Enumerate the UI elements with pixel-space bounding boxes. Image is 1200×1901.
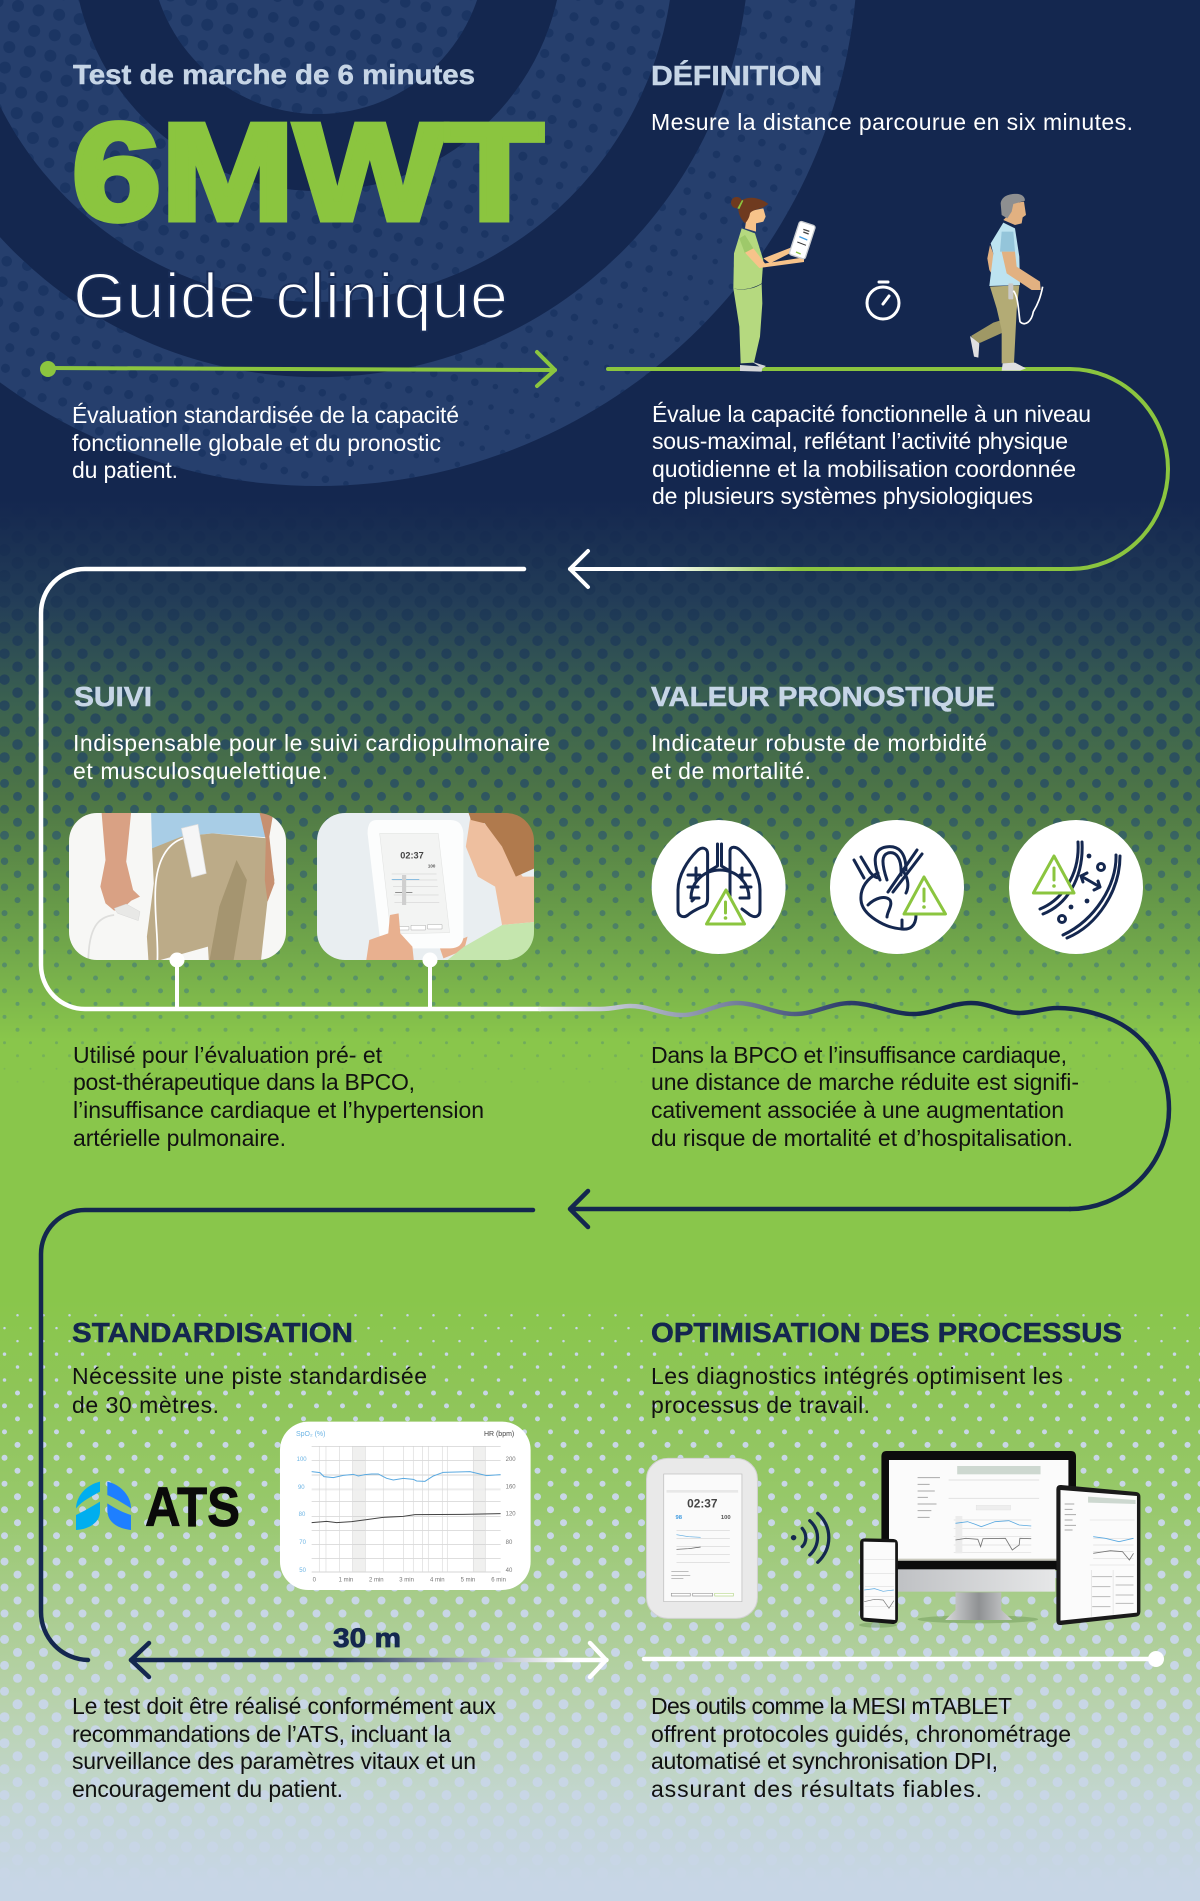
text block: intro: fonctionnelle globale et du pronostic bbox=[72, 430, 441, 456]
text block: suivi: l’insuffisance cardiaque et l’hypertension bbox=[73, 1097, 484, 1123]
text: suivi intro: et musculosquelettique. bbox=[73, 758, 328, 784]
heading: suivi: SUIVI bbox=[74, 681, 152, 712]
chart: SpO2 and heart rate: 50 bbox=[299, 1568, 307, 1574]
text block: suivi bbox=[73, 1042, 484, 1151]
subtitle: test de marche: Test de marche de 6 minutes bbox=[73, 59, 475, 90]
text: suivi intro bbox=[73, 730, 550, 784]
chart: SpO2 and heart rate: 40 bbox=[506, 1568, 513, 1574]
arrow: green intro arrow bbox=[40, 352, 555, 386]
text block: optimisation: automatisé et synchronisation DPI, bbox=[651, 1748, 998, 1774]
text block: optimisation: offrent protocoles guidés, chronométrage bbox=[651, 1721, 1071, 1747]
text block: définition: quotidienne et la mobilisation coordonnée bbox=[652, 456, 1076, 482]
chart: SpO2 and heart rate: 70 bbox=[299, 1540, 307, 1546]
connector: navy left loop and 30 m arrow bbox=[41, 1210, 606, 1677]
chart: SpO2 and heart rate: 4 min bbox=[430, 1577, 445, 1583]
connector: white line with end dot bbox=[644, 1651, 1164, 1667]
text: standardisation intro: Nécessite une piste standardisée bbox=[72, 1363, 427, 1389]
title: guide clinique: Guide clinique bbox=[73, 260, 508, 332]
chart: SpO2 and heart rate: 160 bbox=[506, 1485, 516, 1491]
text block: valeur pronostique: cativement associée à une augmentation bbox=[651, 1097, 1064, 1123]
text block: valeur pronostique: du risque de mortalité et d’hospitalisation. bbox=[651, 1125, 1073, 1151]
icon: lungs with warning bbox=[652, 820, 786, 954]
photo: clinician using tablet bbox=[314, 810, 538, 963]
text: standardisation intro bbox=[72, 1363, 427, 1418]
text block: valeur pronostique bbox=[651, 1042, 1079, 1151]
chart: SpO2 and heart rate: HR (bpm) bbox=[484, 1431, 514, 1438]
heading: optimisation: OPTIMISATION DES PROCESSUS bbox=[651, 1317, 1122, 1348]
icon: wireless signal bbox=[791, 1513, 829, 1562]
chart: SpO2 and heart rate bbox=[280, 1422, 531, 1590]
text block: standardisation: encouragement du patient. bbox=[72, 1776, 343, 1802]
illustration: MESI tablet device bbox=[647, 1458, 757, 1618]
background: dark halftone dots bbox=[0, 511, 1200, 1082]
text block: suivi: post-thérapeutique dans la BPCO, bbox=[73, 1069, 415, 1095]
text block: intro bbox=[72, 402, 459, 483]
chart: SpO2 and heart rate: 3 min bbox=[399, 1577, 414, 1583]
text: valeur pronostique intro: Indicateur robuste de morbidité bbox=[651, 730, 987, 756]
text block: définition: sous-maximal, reflétant l’activité physique bbox=[652, 428, 1068, 454]
text block: standardisation: recommandations de l’ATS, incluant la bbox=[72, 1721, 451, 1747]
label: 30 m: 30 m bbox=[333, 1623, 401, 1653]
photo: clinician using tablet: 100 bbox=[428, 864, 436, 869]
chart: SpO2 and heart rate: 80 bbox=[506, 1540, 513, 1546]
logo: ATS: ATS bbox=[145, 1475, 240, 1538]
illustration: MESI tablet device: 98 bbox=[675, 1515, 683, 1521]
text block: optimisation: assurant des résultats fiables. bbox=[651, 1776, 982, 1802]
connector: green loop with white arrow bbox=[570, 369, 1168, 587]
heading: valeur pronostique: VALEUR PRONOSTIQUE bbox=[651, 681, 995, 712]
text block: valeur pronostique: Dans la BPCO et l’insuffisance cardiaque, bbox=[651, 1042, 1067, 1068]
connector: photo nodes bbox=[170, 952, 438, 1009]
text: standardisation intro: de 30 mètres. bbox=[72, 1392, 219, 1418]
text block: définition: de plusieurs systèmes physiologiques bbox=[652, 483, 1033, 509]
icon: stopwatch bbox=[867, 282, 899, 319]
illustration: MESI tablet device: 02:37 bbox=[687, 1497, 718, 1510]
connector: white left loop and wave bbox=[41, 569, 1169, 1227]
illustration: MESI tablet device: 100 bbox=[721, 1515, 731, 1521]
chart: SpO2 and heart rate: 120 bbox=[506, 1512, 516, 1518]
text: valeur pronostique intro: et de mortalité. bbox=[651, 758, 811, 784]
text: optimisation intro: processus de travail. bbox=[651, 1392, 870, 1418]
heading: définition: DÉFINITION bbox=[651, 60, 822, 91]
chart: SpO2 and heart rate: 2 min bbox=[369, 1577, 384, 1583]
chart: SpO2 and heart rate: 0 bbox=[313, 1577, 317, 1583]
text block: intro: Évaluation standardisée de la capacité bbox=[72, 402, 459, 428]
logo: ATS bbox=[76, 1475, 240, 1538]
text block: standardisation: surveillance des paramètres vitaux et un bbox=[72, 1748, 476, 1774]
illustration: computer, phone and tablet bbox=[859, 1451, 1140, 1628]
chart: SpO2 and heart rate: 1 min bbox=[339, 1577, 353, 1583]
chart: SpO2 and heart rate: 5 min bbox=[461, 1577, 475, 1583]
text: définition intro: Mesure la distance parcourue en six minutes. bbox=[651, 109, 1133, 135]
text block: optimisation: Des outils comme la MESI mTABLET bbox=[651, 1693, 1012, 1719]
chart: SpO2 and heart rate: 200 bbox=[506, 1457, 516, 1463]
illustration: walking patient bbox=[970, 194, 1043, 371]
text block: optimisation bbox=[651, 1693, 1071, 1802]
text block: suivi: artérielle pulmonaire. bbox=[73, 1125, 286, 1151]
icon: blood vessel with warning bbox=[1009, 820, 1143, 954]
text: optimisation intro: Les diagnostics intégrés optimisent les bbox=[651, 1363, 1063, 1389]
text block: valeur pronostique: une distance de marche réduite est signifi- bbox=[651, 1069, 1079, 1095]
heading: standardisation: STANDARDISATION bbox=[72, 1317, 353, 1348]
text block: définition bbox=[652, 401, 1091, 509]
chart: SpO2 and heart rate: SpO₂ (%) bbox=[296, 1431, 325, 1438]
text: valeur pronostique intro bbox=[651, 730, 987, 784]
text: optimisation intro bbox=[651, 1363, 1063, 1418]
text block: standardisation bbox=[72, 1693, 496, 1802]
text block: définition: Évalue la capacité fonctionnelle à un niveau bbox=[652, 401, 1091, 427]
icon: heart with warning bbox=[830, 820, 964, 954]
text: suivi intro: Indispensable pour le suivi cardiopulmonaire bbox=[73, 730, 550, 756]
background: concentric rings bbox=[0, 0, 856, 486]
chart: SpO2 and heart rate: 90 bbox=[298, 1485, 305, 1491]
text block: suivi: Utilisé pour l’évaluation pré- et bbox=[73, 1042, 383, 1068]
background: light halftone dots bbox=[0, 1315, 1200, 1886]
chart: SpO2 and heart rate: 100 bbox=[297, 1457, 307, 1463]
illustration: nurse with tablet bbox=[731, 197, 816, 372]
text block: standardisation: Le test doit être réalisé conformément aux bbox=[72, 1693, 496, 1719]
text block: intro: du patient. bbox=[72, 457, 178, 483]
title: 6MWT: 6MWT bbox=[72, 95, 543, 249]
photo: clinician using tablet: 02:37 bbox=[400, 851, 424, 862]
chart: SpO2 and heart rate: 80 bbox=[299, 1512, 306, 1518]
photo: patient with sensor bbox=[66, 810, 290, 963]
chart: SpO2 and heart rate: 6 min bbox=[491, 1577, 506, 1583]
